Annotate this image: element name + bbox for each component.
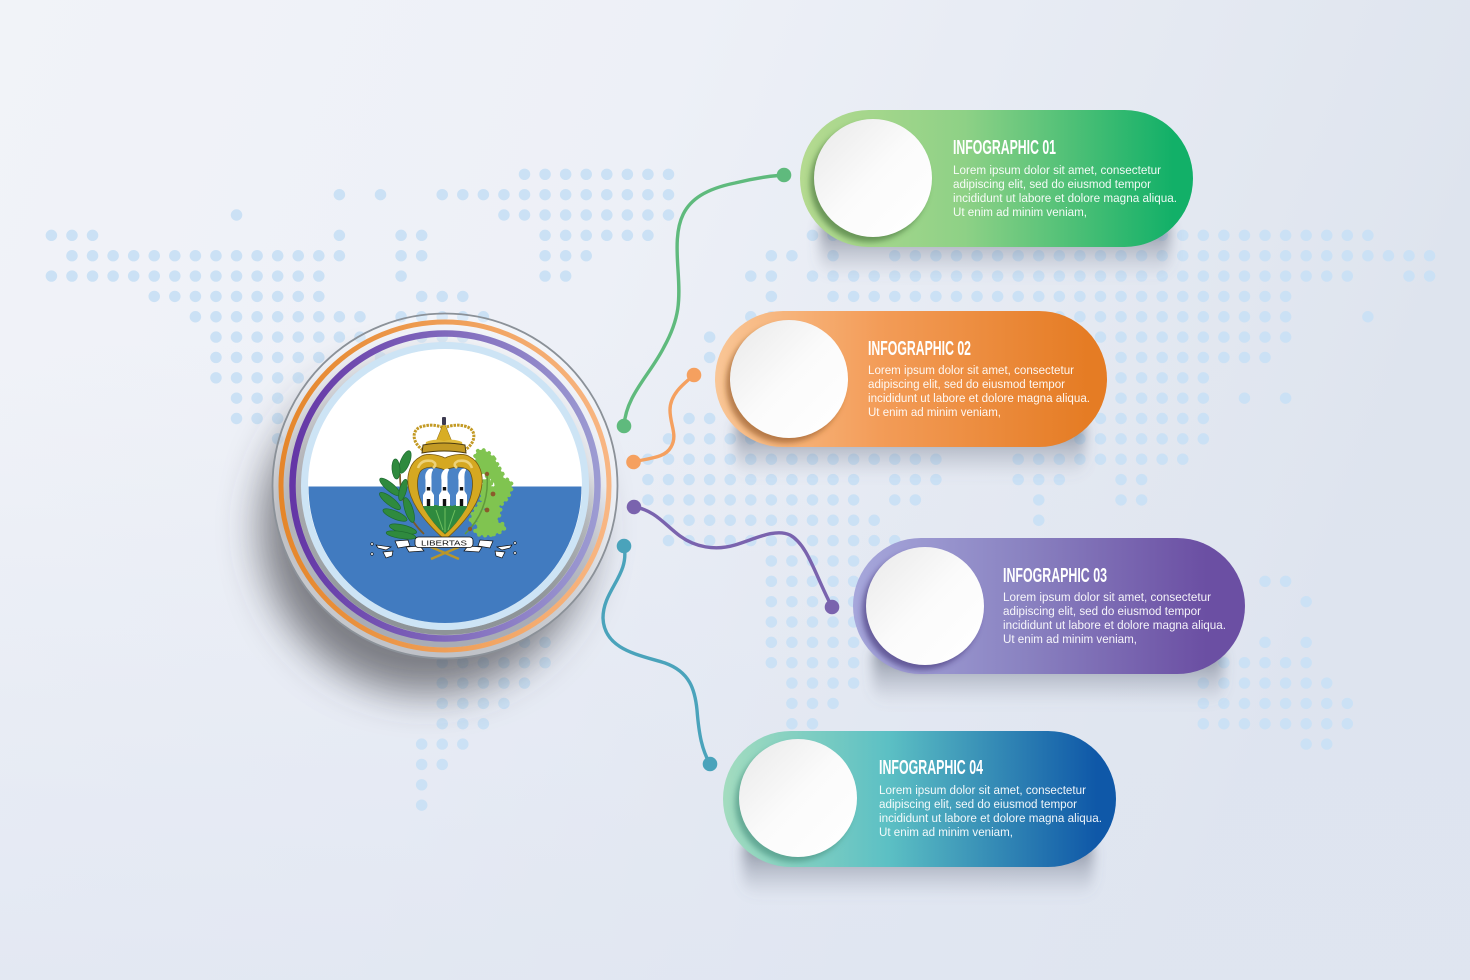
shaded gaps between rings (287, 328, 603, 644)
shield scrolls (418, 461, 472, 468)
outer grey ring (272, 314, 618, 658)
pill (800, 110, 1193, 247)
circle shadow (810, 124, 928, 242)
body text: incididunt ut labore et dolore magna aliqua. (953, 191, 1177, 205)
circle shadow (735, 744, 853, 862)
title: INFOGRAPHIC 04 (879, 757, 984, 779)
orange ring (281, 322, 609, 650)
panel shadow (735, 415, 1085, 477)
body text: Lorem ipsum dolor sit amet, consectetur (1003, 590, 1211, 604)
emblem drop shadow (261, 363, 591, 693)
pill (715, 311, 1107, 447)
three towers (423, 469, 467, 506)
circle shadow (726, 325, 844, 443)
connector: green to panel 01 (617, 168, 791, 433)
body text: incididunt ut labore et dolore magna aliqua. (868, 391, 1090, 405)
body text (879, 783, 1102, 839)
title: INFOGRAPHIC 02 (868, 338, 971, 360)
flag emblem (261, 314, 618, 693)
panel: infographic 01 (800, 110, 1193, 277)
white circle (739, 739, 857, 857)
purple ring (292, 334, 598, 638)
circle shadow (862, 552, 980, 670)
body text: Lorem ipsum dolor sit amet, consectetur (868, 363, 1074, 377)
body text: Ut enim ad minim veniam, (1003, 632, 1137, 646)
body text: adipiscing elit, sed do eiusmod tempor (1003, 604, 1201, 618)
pill (723, 731, 1116, 867)
body text: Ut enim ad minim veniam, (868, 405, 1001, 419)
pill (853, 538, 1245, 674)
panel shadow (820, 215, 1170, 277)
body text: Lorem ipsum dolor sit amet, consectetur (879, 783, 1086, 797)
ribbon (371, 537, 516, 559)
body text: adipiscing elit, sed do eiusmod tempor (953, 177, 1151, 191)
body text: Ut enim ad minim veniam, (953, 205, 1087, 219)
body text: adipiscing elit, sed do eiusmod tempor (879, 797, 1077, 811)
light blue ring (304, 346, 586, 626)
white circle (814, 119, 932, 237)
flag: blue half (308, 486, 582, 623)
body text: adipiscing elit, sed do eiusmod tempor (868, 377, 1065, 391)
dotted world map (51, 174, 1430, 805)
panel: infographic 02 (715, 311, 1107, 477)
title: INFOGRAPHIC 03 (1003, 565, 1107, 587)
hill (423, 504, 467, 534)
panel: infographic 03 (853, 538, 1245, 704)
body text: Lorem ipsum dolor sit amet, consectetur (953, 163, 1161, 177)
body text (953, 163, 1177, 219)
panel shadow (743, 835, 1093, 897)
shield (408, 454, 482, 540)
connector: orange to panel 02 (626, 368, 701, 469)
panel shadow (873, 642, 1223, 704)
ring base disc (273, 314, 617, 658)
title: INFOGRAPHIC 01 (953, 137, 1056, 159)
connector: teal to panel 04 (603, 539, 717, 771)
body text: incididunt ut labore et dolore magna aliqua. (879, 811, 1102, 825)
flag: white half (308, 350, 582, 486)
body text (868, 363, 1090, 419)
coat of arms (371, 417, 517, 559)
oak stem and acorns (465, 472, 495, 534)
white circle (730, 320, 848, 438)
ribbon: LIBERTAS (421, 538, 467, 548)
body text (1003, 590, 1226, 646)
oak branch (468, 446, 517, 538)
body text: incididunt ut labore et dolore magna aliqua. (1003, 618, 1226, 632)
laurel branch (377, 449, 424, 541)
white circle (866, 547, 984, 665)
crown (414, 417, 474, 453)
connector: purple to panel 03 (627, 500, 839, 614)
panel: infographic 04 (723, 731, 1116, 897)
body text: Ut enim ad minim veniam, (879, 825, 1013, 839)
